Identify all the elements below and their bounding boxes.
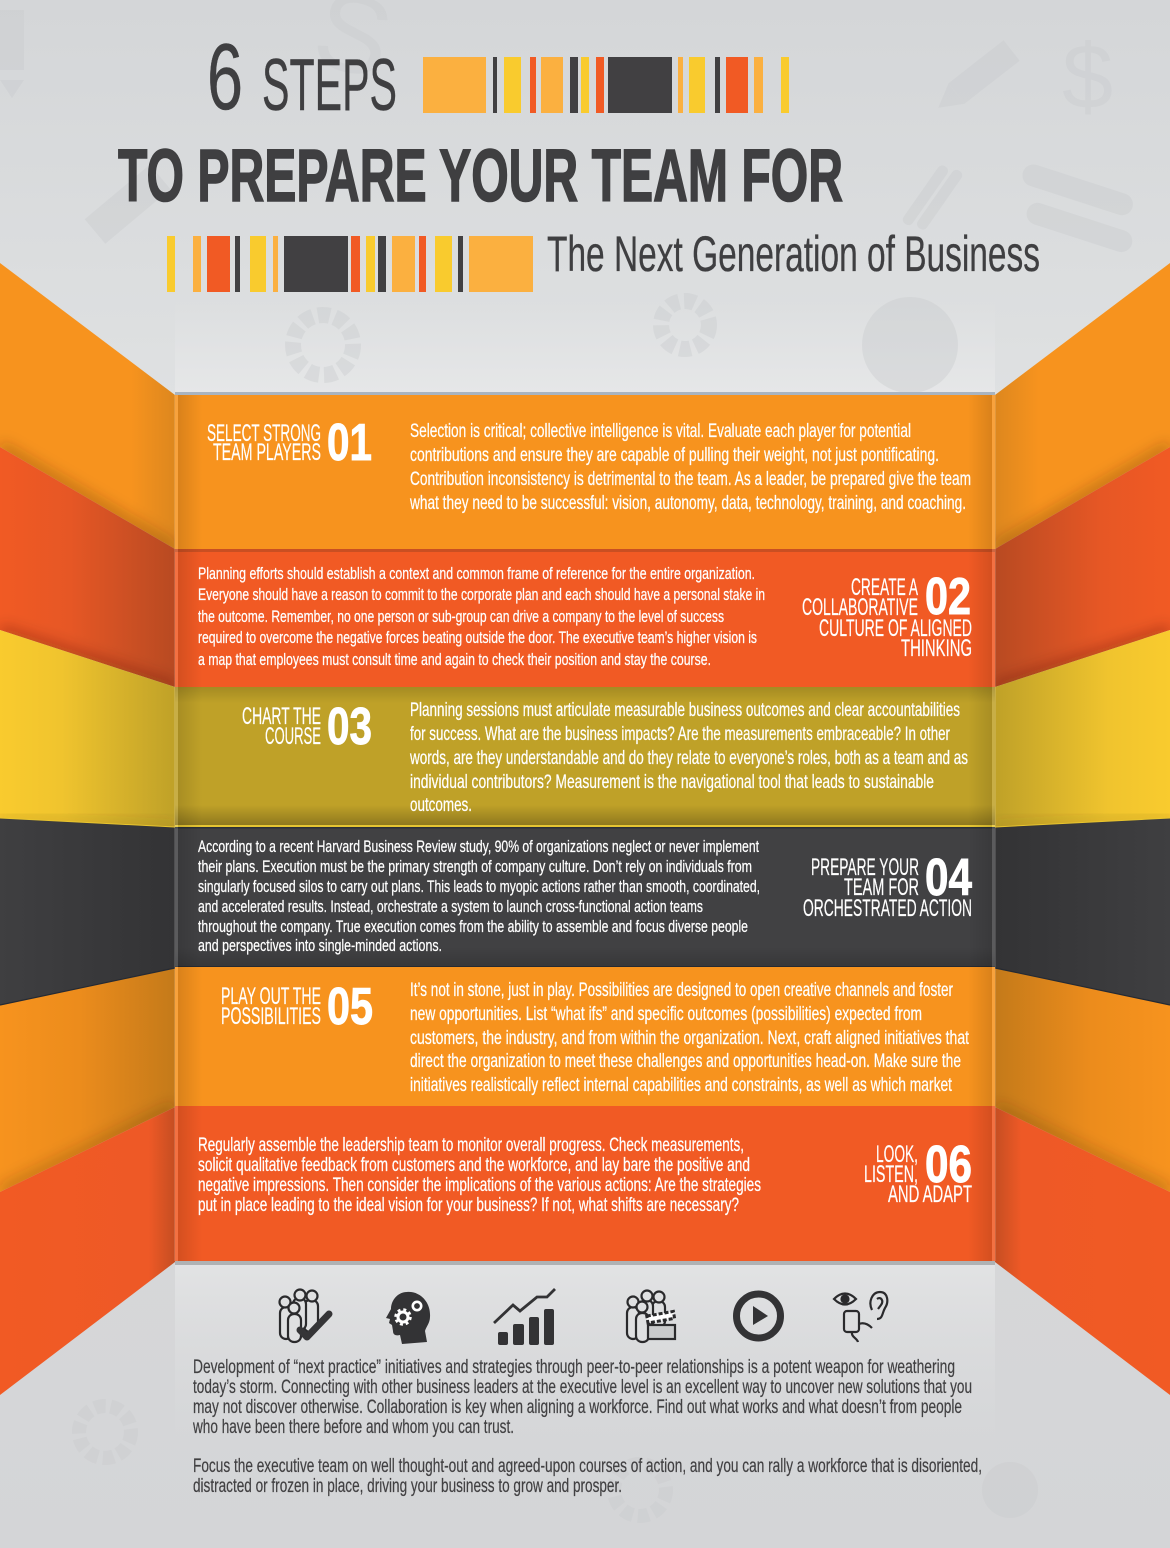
text: step 6: Regularly assemble the leadership team to monitor overall progress. Check measurements,: [198, 1135, 744, 1156]
text: step 4: and perspectives into single-minded actions.: [198, 936, 442, 955]
text: step 5: [410, 979, 969, 1096]
text: step 4: their plans. Execution must be the primary strength of company culture. Don’t rely on individuals from: [198, 857, 752, 876]
text: step 2: required to overcome the negative forces beating outside the door. The executive team’s higher vision is: [198, 628, 757, 647]
text: step 3: outcomes.: [410, 794, 472, 816]
heading: step 3: 03: [327, 698, 372, 756]
text: step 4: singularly focused silos to carry out plans. This leads to myopic actions rather than smooth, coordinated,: [198, 877, 760, 896]
heading: step 3: COURSE: [265, 723, 321, 750]
heading: step 5: POSSIBILITIES: [221, 1003, 321, 1030]
heading: step 1: TEAM PLAYERS: [213, 439, 321, 466]
heading: step 4: PREPARE YOUR: [811, 854, 919, 881]
text: step 4: throughout the company. True execution comes from the ability to assemble and focus diverse people: [198, 917, 748, 936]
heading: step 4: [803, 849, 972, 922]
left perspective ribbons: [0, 263, 175, 1395]
text: step 5: new opportunities. List “what ifs” and specific outcomes (possibilities) expected from: [410, 1003, 922, 1025]
text: step 2: Everyone should have a reason to commit to the corporate plan and each should have a personal stake in: [198, 585, 765, 604]
right perspective ribbons: [995, 263, 1170, 1395]
heading: step 5: [221, 978, 373, 1036]
title: 6 steps: STEPS: [262, 45, 397, 126]
icon: team with check mark: [280, 1290, 329, 1342]
heading: step 4: 04: [925, 849, 972, 907]
text: step 2: [198, 564, 765, 669]
bottom colour barcode: [167, 236, 533, 292]
panel edge shading and seams: [174, 395, 996, 1261]
text: step 6: negative impressions. Then consider the implications of the various actions: Are the strategies: [198, 1175, 761, 1196]
top colour barcode: [423, 57, 789, 113]
heading: step 6: AND ADAPT: [888, 1181, 972, 1208]
heading: step 2: THINKING: [901, 635, 972, 662]
text: step 3: individual contributors? Measurement is the navigational tool that leads to sustainable: [410, 771, 934, 793]
text: step 5: It’s not in stone, just in play. Possibilities are designed to open creative channels and foster: [410, 979, 953, 1001]
text: step 2: a map that employees must consult time and again to check their position and stay the course.: [198, 650, 711, 669]
text: step 6: put in place leading to the ideal vision for your business? If not, what shifts are necessary?: [198, 1195, 739, 1216]
heading: step 4: TEAM FOR: [844, 874, 919, 901]
title: 6 steps: [207, 24, 397, 129]
panel: step 1: [175, 392, 995, 549]
text: step 5: customers, the industry, and from within the organization. Next, craft aligned initiatives that: [410, 1027, 969, 1049]
icon: play button: [736, 1294, 780, 1338]
heading: step 2: CULTURE OF ALIGNED: [819, 615, 972, 642]
text: step 6: solicit qualitative feedback from customers and the workforce, and lay bare the positive and: [198, 1155, 750, 1176]
text: step 1: contributions and ensure they are capable of pulling their weight, not just pontificating.: [410, 444, 939, 466]
panel: step 4: [175, 827, 995, 968]
faint background icons: $: [1062, 26, 1113, 128]
heading: step 1: 01: [327, 414, 372, 472]
text: step 1: Selection is critical; collective intelligence is vital. Evaluate each player for potential: [410, 420, 911, 442]
heading: step 3: [242, 698, 372, 756]
text: step 5: initiatives realistically reflect internal capabilities and constraints, as well as which market: [410, 1074, 952, 1096]
heading: step 4: ORCHESTRATED ACTION: [803, 895, 972, 922]
heading: step 6: LOOK,: [876, 1141, 918, 1168]
heading: step 1: [207, 414, 372, 472]
heading: step 6: 06: [925, 1136, 972, 1194]
icon: head with gears: [386, 1292, 430, 1344]
text: closing paragraph two: [193, 1456, 982, 1497]
text: closing paragraph two: distracted or frozen in place, driving your business to grow and prosper.: [193, 1476, 622, 1497]
icon: rising bar chart: [494, 1289, 555, 1345]
text: step 4: According to a recent Harvard Business Review study, 90% of organizations neglect or never implement: [198, 837, 759, 856]
text: step 1: [409, 420, 971, 514]
text: closing paragraph one: who have been there before and whom you can trust.: [192, 1417, 514, 1438]
heading: step 6: LISTEN,: [864, 1161, 918, 1188]
panel: step 6: [175, 1106, 995, 1265]
heading: step 2: COLLABORATIVE: [802, 594, 918, 621]
text: step 4: and accelerated results. Instead, orchestrate a system to launch cross-functional action teams: [198, 897, 703, 916]
text: step 2: the outcome. Remember, no one person or sub-group can drive a company to the level of success: [198, 607, 724, 626]
heading: step 2: [802, 568, 972, 662]
text: step 5: direct the organization to meet these challenges and opportunities head-on. Make sure the: [410, 1050, 961, 1072]
heading: step 6: [864, 1136, 972, 1208]
text: step 4: [198, 837, 760, 955]
heading: step 5: 05: [327, 978, 373, 1036]
icon: team with clapperboard: [627, 1290, 675, 1342]
heading: step 3: CHART THE: [242, 703, 321, 730]
panel: step 3: [175, 687, 995, 827]
heading: step 2: 02: [925, 568, 971, 626]
text: step 2: Planning efforts should establish a context and common frame of reference for the entire organization.: [198, 564, 755, 583]
text: closing paragraph one: [192, 1357, 972, 1438]
panel: step 2: [175, 549, 995, 687]
text: step 6: [198, 1135, 761, 1216]
title: 6 steps: 6: [207, 24, 243, 129]
heading: step 2: CREATE A: [851, 574, 918, 601]
panel: step 5: [175, 967, 995, 1106]
text: step 3: [409, 699, 968, 816]
heading: step 1: SELECT STRONG: [207, 420, 321, 447]
heading: step 5: PLAY OUT THE: [221, 983, 321, 1010]
icon: eye, ear and mouth: [834, 1292, 887, 1342]
